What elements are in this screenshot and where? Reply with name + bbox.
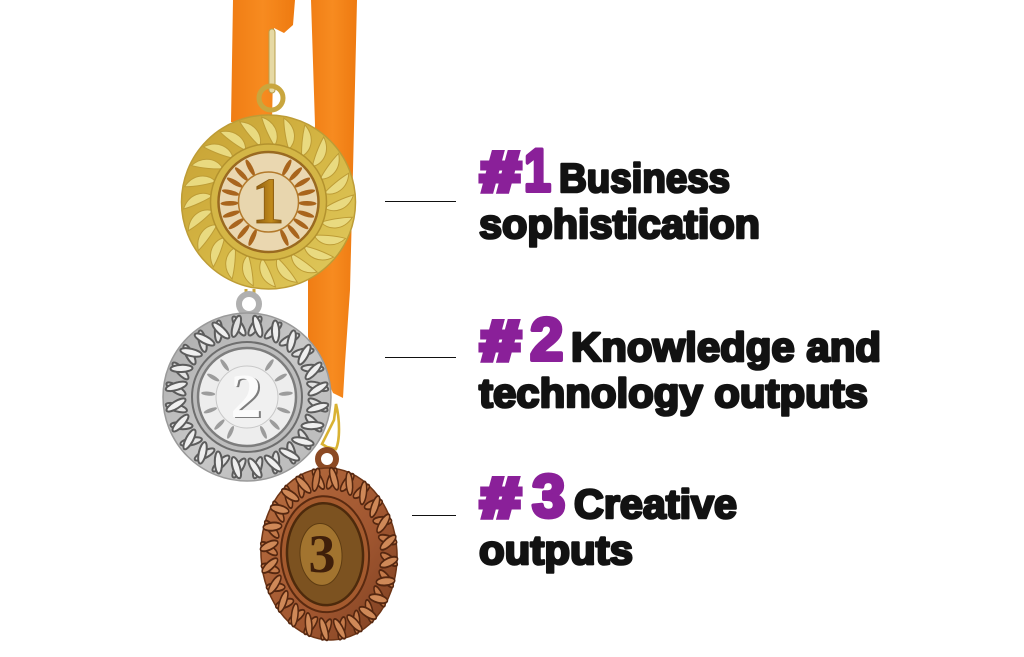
icon: bronze medal — [254, 404, 404, 647]
label: #3 Creative outputs: outputs — [479, 527, 633, 573]
label: #1 Business sophistication: # — [481, 140, 520, 203]
ribbons — [231, 0, 357, 398]
connector line 1 — [385, 200, 456, 202]
icon: silver medal: 2 — [230, 363, 262, 431]
label: #1 Business sophistication: sophistication — [479, 201, 760, 247]
icon: silver medal — [163, 289, 331, 481]
label: #3 Creative outputs: Creative — [574, 481, 737, 527]
connector line 2 — [385, 356, 456, 358]
label: #2 Knowledge and technology outputs: # — [481, 309, 520, 372]
label: #2 Knowledge and technology outputs — [479, 306, 881, 416]
icon: silver medal: 2 — [232, 364, 264, 432]
label: #3 Creative outputs: 3 — [532, 463, 565, 530]
label: #1 Business sophistication: 1 — [524, 137, 551, 204]
label: #2 Knowledge and technology outputs: technology outputs — [479, 370, 868, 416]
label: #1 Business sophistication — [479, 137, 760, 247]
icon: bronze medal: 3 — [308, 524, 336, 584]
label: #3 Creative outputs — [479, 463, 737, 573]
icon: gold medal: 1 — [252, 165, 284, 238]
connector line 3 — [412, 514, 456, 516]
label: #3 Creative outputs: # — [481, 466, 520, 529]
label: #2 Knowledge and technology outputs: Knowledge and — [571, 324, 881, 370]
icon: gold medal — [182, 29, 356, 289]
label: #1 Business sophistication: Business — [559, 155, 730, 201]
label: #2 Knowledge and technology outputs: 2 — [530, 306, 563, 373]
